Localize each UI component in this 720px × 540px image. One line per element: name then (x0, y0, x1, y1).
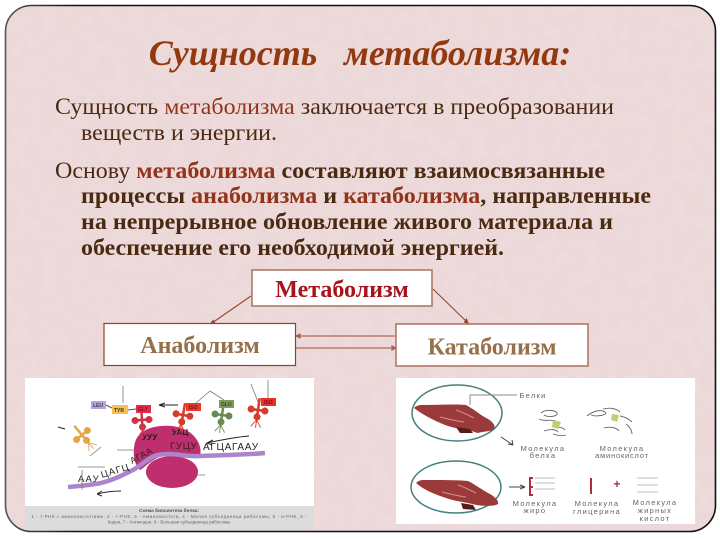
circle: protein meat (412, 385, 502, 441)
labels: Белки (519, 391, 547, 400)
tRNA: GLY (131, 407, 153, 439)
text block: definition: веществ и энергии. (81, 120, 277, 146)
text block: definition (55, 94, 614, 146)
labels: Молекула (513, 499, 557, 508)
tRNA: ISO second (246, 397, 270, 429)
amino acid tags (91, 398, 276, 414)
plus sign: + (613, 477, 621, 491)
labels: белка (530, 451, 556, 460)
box: Анаболизм: Анаболизм (140, 333, 260, 359)
image: protein biosynthesis diagram (25, 378, 314, 530)
mRNA nucleotide labels: ААУ (78, 474, 100, 485)
tRNA: released orange (67, 419, 101, 455)
protein molecules (539, 408, 632, 436)
image: protein biosynthesis diagram: Кодон, 7 - Антикодон, 8 - Большая субъединица рибосомы (108, 520, 230, 524)
amino acid tags: ISO (264, 400, 273, 406)
labels: Молекула (521, 444, 565, 453)
arrow: catabolism to anabolism (296, 334, 396, 338)
tRNA: ISO (170, 401, 195, 434)
ribosome small subunit (146, 456, 198, 488)
labels: жиро (524, 506, 546, 515)
text block: basis of metabolism: обеспечение его необходимой энергией. (81, 235, 504, 261)
mRNA strand (68, 453, 265, 487)
tRNA: GLU (210, 402, 234, 434)
arrow: anabolism to catabolism (296, 346, 396, 350)
circle: fat meat (411, 461, 501, 513)
labels: глицерина (573, 507, 621, 516)
arrow: metabolism to catabolism (433, 289, 468, 324)
box: Катаболизм: Катаболизм (428, 334, 556, 360)
labels: Молекула (633, 498, 677, 507)
labels (513, 391, 677, 523)
labels: жирных (638, 506, 672, 515)
arrow: metabolism to anabolism (210, 296, 251, 324)
caption: Схема биосинтеза белка: (139, 507, 199, 514)
protein molecule cores (552, 414, 619, 429)
box: Метаболизм: Метаболизм (275, 277, 409, 303)
image: protein biosynthesis diagram: УАЦ (172, 428, 189, 437)
image: protein biosynthesis diagram: АГЦАГААУ (203, 442, 259, 453)
amino acid tags: ISO (189, 405, 198, 411)
title: Сущность метаболизма: (149, 33, 571, 73)
image: protein biosynthesis diagram: АГАА (128, 446, 154, 466)
image: catabolism of proteins and fats (396, 378, 695, 524)
box: Катаболизм (396, 324, 588, 366)
ribosome large subunit (134, 426, 201, 470)
text block: basis of metabolism: процессы анаболизма и катаболизма, направленные (81, 183, 651, 209)
text block: basis of metabolism: на непрерывное обновление живого материала и (81, 209, 613, 235)
text block: definition: Сущность метаболизма заключается в преобразовании (55, 94, 614, 120)
process arrows and pointers (58, 403, 249, 496)
fatty acid lines (535, 478, 658, 492)
labels: Молекула (575, 499, 619, 508)
box: Метаболизм (252, 270, 432, 306)
box: Анаболизм (104, 324, 296, 366)
text block: basis of metabolism: Основу метаболизма составляют взаимосвязанные (55, 158, 605, 184)
labels: кислот (640, 514, 670, 523)
image: protein biosynthesis diagram: ЦАГЦ (100, 462, 131, 481)
amino acid tags: GLY (138, 407, 148, 413)
fat molecules (530, 477, 591, 496)
amino acid tags: LEU (93, 403, 103, 409)
image: protein biosynthesis diagram: ГУЦУ (170, 441, 198, 452)
amino acid tags: TYR (114, 408, 124, 414)
labels: Молекула (600, 444, 644, 453)
text block: basis of metabolism (55, 158, 651, 261)
image: protein biosynthesis diagram: УУУ (142, 433, 158, 442)
image: protein biosynthesis diagram: 1 - т-РНК с аминокислотами, 2 - т-РНК, 3 - Аминокислота, 4 - Малая субъединица рибосомы, 5 - и-РНК, 6 - (32, 514, 307, 519)
amino acid tags: GLU (221, 402, 232, 408)
labels: аминокислот (595, 451, 649, 460)
label lines and arrows (470, 395, 525, 489)
